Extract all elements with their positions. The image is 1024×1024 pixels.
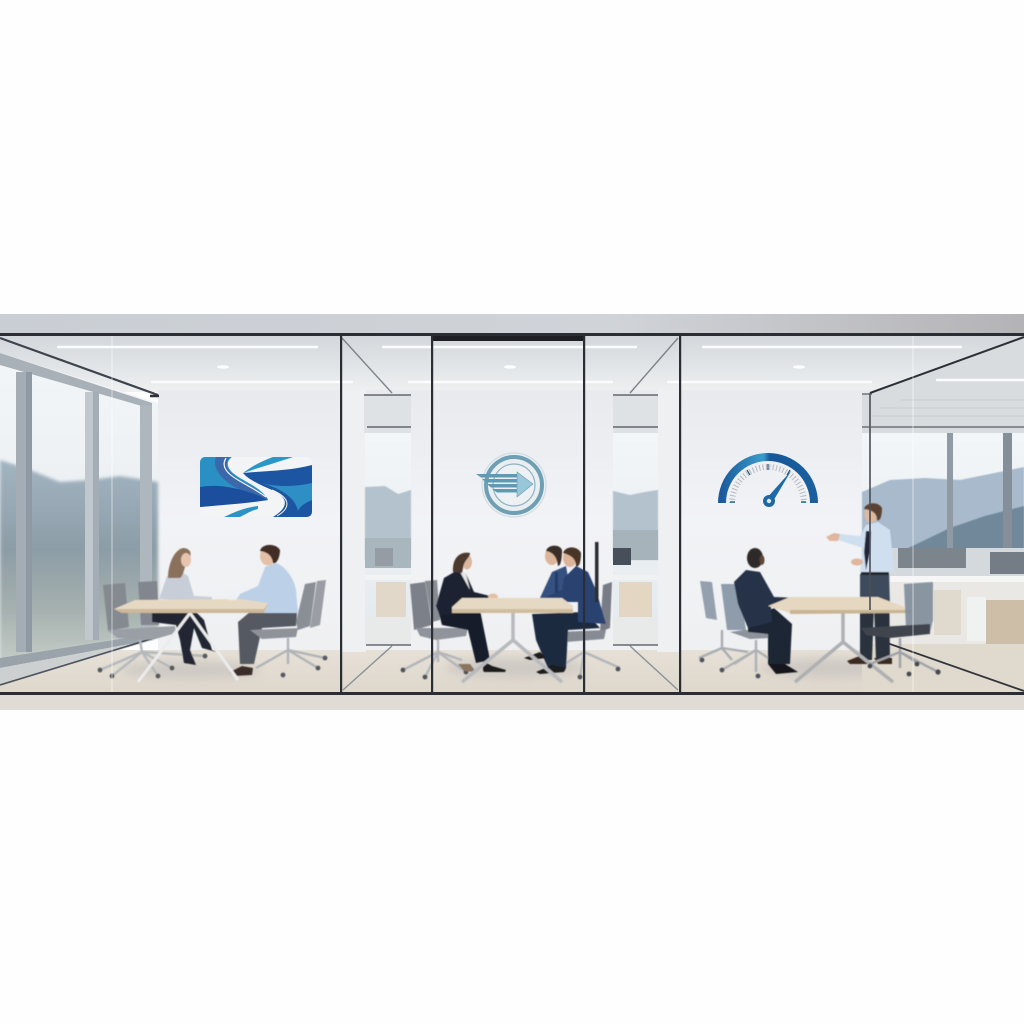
dark blue lower left <box>200 486 268 507</box>
upper glass ceiling <box>364 395 411 433</box>
room 2 left floor diagonal <box>343 646 392 690</box>
lower office wall <box>862 578 1024 644</box>
front chair seat <box>730 630 792 639</box>
mullion one dark side <box>26 372 32 652</box>
light blue wedge at bottom <box>224 506 258 517</box>
right open office, room 3 <box>862 338 1024 693</box>
frame post three <box>583 336 585 693</box>
gauge end marks <box>730 501 806 503</box>
man hair <box>260 545 280 563</box>
presenter belt <box>861 572 889 575</box>
room 3 head lines <box>862 394 1024 427</box>
left chair back <box>410 582 432 630</box>
seated man shoes <box>768 664 798 674</box>
chair back second <box>138 581 159 625</box>
wood cabinet <box>376 582 406 617</box>
near mountain <box>900 506 1024 560</box>
man shirt <box>236 563 298 613</box>
presenter shoes <box>847 655 892 664</box>
floor wedge beside sill <box>0 640 154 685</box>
floor <box>613 617 658 645</box>
presenter face <box>864 505 878 523</box>
sky <box>0 353 158 662</box>
white pedestal <box>934 590 961 635</box>
deep blue right region <box>243 465 312 517</box>
room 1 meeting scene <box>98 545 327 682</box>
desk top <box>890 576 1024 582</box>
woman face <box>181 553 191 567</box>
woman collar <box>460 572 470 590</box>
wing stripes <box>476 474 517 492</box>
floor shadows under tables <box>120 658 900 679</box>
outer disc <box>482 453 546 517</box>
white box <box>967 597 986 641</box>
woman blouse <box>159 571 212 601</box>
left inner lines <box>364 395 411 645</box>
forest <box>365 538 411 568</box>
sky <box>862 433 1024 648</box>
man shoes <box>230 666 253 676</box>
frame post four <box>679 336 681 693</box>
door handle <box>595 542 598 602</box>
room 2 right floor diagonal <box>630 646 678 690</box>
mullion three <box>140 405 152 637</box>
room interiors <box>0 336 1024 693</box>
seated man trousers <box>748 608 792 664</box>
room 1 strips <box>58 347 352 382</box>
left side view, room 2 <box>342 390 411 652</box>
glass on table <box>228 590 236 600</box>
left castors <box>401 668 468 679</box>
mountains <box>365 486 411 560</box>
seated man jacket <box>734 570 800 628</box>
mountains <box>613 490 658 560</box>
back man jacket <box>540 566 572 600</box>
ceiling light strips <box>58 347 1024 382</box>
glass chair base <box>870 638 938 672</box>
wood cabinet <box>986 600 1024 645</box>
presenter shirt <box>838 522 894 574</box>
room 2 strips <box>383 347 636 382</box>
room 3 ceiling diagonal <box>870 337 1024 393</box>
back chair base <box>699 630 748 660</box>
woman trousers <box>437 606 490 663</box>
woman hair <box>453 553 470 573</box>
back man tie <box>555 572 558 594</box>
arrow head <box>517 472 533 497</box>
front chair base <box>722 640 790 672</box>
presenter upper trousers <box>860 574 890 606</box>
window head band <box>0 353 152 409</box>
left window wall, room 1 <box>0 338 158 685</box>
room 2 meeting scene <box>401 542 620 682</box>
light blue upper left <box>200 457 268 507</box>
right inner lines <box>613 395 658 645</box>
presenter hair <box>864 503 882 520</box>
top frame <box>0 333 1024 336</box>
monitor <box>613 548 631 565</box>
illustration: three glass meeting rooms <box>0 314 1024 710</box>
mountains and forest <box>0 460 158 660</box>
presenter hand <box>826 533 840 541</box>
sky <box>365 433 411 645</box>
right chair base <box>558 642 620 678</box>
room 2 left ceiling diagonal <box>342 338 392 393</box>
gauge arc <box>722 457 814 503</box>
room 3 strips <box>668 347 1024 382</box>
presenter legs <box>860 574 890 660</box>
back chair <box>700 581 717 620</box>
seated man head <box>747 548 763 568</box>
back man head <box>545 547 559 565</box>
right chair backs <box>296 582 316 630</box>
right castors <box>578 667 620 679</box>
glass joint lines <box>112 336 913 692</box>
back walls <box>158 390 680 652</box>
gauge ticks <box>732 467 804 503</box>
thin white lobe line <box>272 490 287 516</box>
woman jacket <box>436 571 490 616</box>
back panel below windows <box>862 548 1024 578</box>
ceiling slats <box>872 400 1024 416</box>
room 2 right ceiling diagonal <box>630 338 678 393</box>
frame post two <box>431 336 433 693</box>
mullion one <box>947 433 953 548</box>
light blue upper wedge <box>243 457 293 473</box>
right chair castors <box>281 656 327 677</box>
inner thin ring <box>493 464 535 506</box>
right side view, room 2 <box>613 390 680 652</box>
far mountains <box>862 467 1024 560</box>
woman shoe second <box>458 664 476 672</box>
hub centre <box>767 499 771 503</box>
upper glass ceiling <box>613 395 658 433</box>
forest <box>613 530 658 560</box>
ceiling <box>0 336 1024 392</box>
table top <box>114 599 268 613</box>
table edge <box>452 609 573 613</box>
table legs <box>795 613 893 682</box>
front man trousers <box>532 612 600 668</box>
table top <box>768 597 912 613</box>
glass chair castors <box>868 662 941 676</box>
wood cabinet <box>619 582 652 617</box>
right chair seat <box>558 630 606 642</box>
mullion two <box>85 392 99 640</box>
ceiling edge line <box>0 338 158 395</box>
front chair back <box>721 584 746 630</box>
front chair castors <box>700 658 760 678</box>
right chair back <box>600 582 612 632</box>
frame post one <box>340 336 342 693</box>
man trousers <box>238 612 297 664</box>
room 3 floor diagonal <box>887 643 1024 691</box>
gauge major ticks <box>747 464 790 475</box>
room 3 corner post <box>869 393 871 610</box>
floor strip <box>0 695 1024 710</box>
glass chair seat <box>861 624 930 638</box>
table edge <box>790 610 912 614</box>
floor edge line <box>0 638 154 685</box>
ceiling spot lights <box>217 365 805 369</box>
door header <box>432 336 585 341</box>
chair castors left <box>98 654 207 678</box>
mid blue swoosh <box>215 457 268 499</box>
glass frames <box>0 333 1024 695</box>
woman hands <box>488 594 498 600</box>
sky <box>613 433 658 645</box>
wall side panel <box>657 390 680 652</box>
floor <box>0 650 1024 693</box>
table top <box>452 598 573 613</box>
wall logo: winged arrow in circle <box>476 453 546 517</box>
monitor <box>375 548 393 566</box>
wall logo: blue S waves <box>200 457 312 517</box>
presenter lower hand <box>851 558 863 566</box>
mullion two <box>1003 433 1012 548</box>
ceiling band <box>0 314 1024 334</box>
light blue right band <box>262 483 312 511</box>
mullion two dark side <box>93 392 99 640</box>
mullion one <box>16 372 32 652</box>
seated man ear <box>760 555 764 565</box>
woman trousers <box>152 612 220 665</box>
chair back left <box>103 583 129 631</box>
right chair base <box>256 638 325 668</box>
chair seat <box>107 626 176 640</box>
desk <box>365 575 411 580</box>
room 3 meeting scene <box>699 503 941 682</box>
bottom frame <box>0 692 1024 695</box>
man head <box>260 546 276 566</box>
needle <box>766 471 791 503</box>
table edge <box>114 603 268 613</box>
chair base left <box>100 640 205 676</box>
left chair seat <box>416 628 468 640</box>
table legs <box>138 613 238 682</box>
thin white swoosh <box>224 458 266 497</box>
left chair back second <box>425 580 440 622</box>
left corner head <box>150 395 159 397</box>
window sill <box>0 634 152 668</box>
table legs <box>462 613 562 682</box>
monitors right <box>990 552 1024 574</box>
woman face <box>462 554 472 570</box>
presenter tie <box>864 531 871 570</box>
floor transition lines <box>112 336 1024 692</box>
desk <box>613 575 658 580</box>
hub <box>763 495 775 507</box>
logo white base <box>200 457 312 517</box>
left chair base <box>403 640 466 677</box>
wall side panel <box>342 390 366 652</box>
right chair seat <box>250 628 298 639</box>
back wall room 3 <box>680 390 870 652</box>
floor <box>862 644 1024 693</box>
wall gauge <box>722 457 814 507</box>
front man hair <box>563 547 581 566</box>
woman shoes <box>483 661 506 672</box>
front man face <box>563 549 577 567</box>
upper ceiling strip <box>862 338 1024 433</box>
back man hair <box>546 546 562 566</box>
glass chair front back <box>904 582 933 632</box>
front man jacket <box>544 566 606 624</box>
woman hair <box>168 548 191 578</box>
blue ring <box>486 457 542 513</box>
monitors <box>898 548 966 568</box>
floor <box>365 617 411 645</box>
front man shoes <box>524 652 566 674</box>
